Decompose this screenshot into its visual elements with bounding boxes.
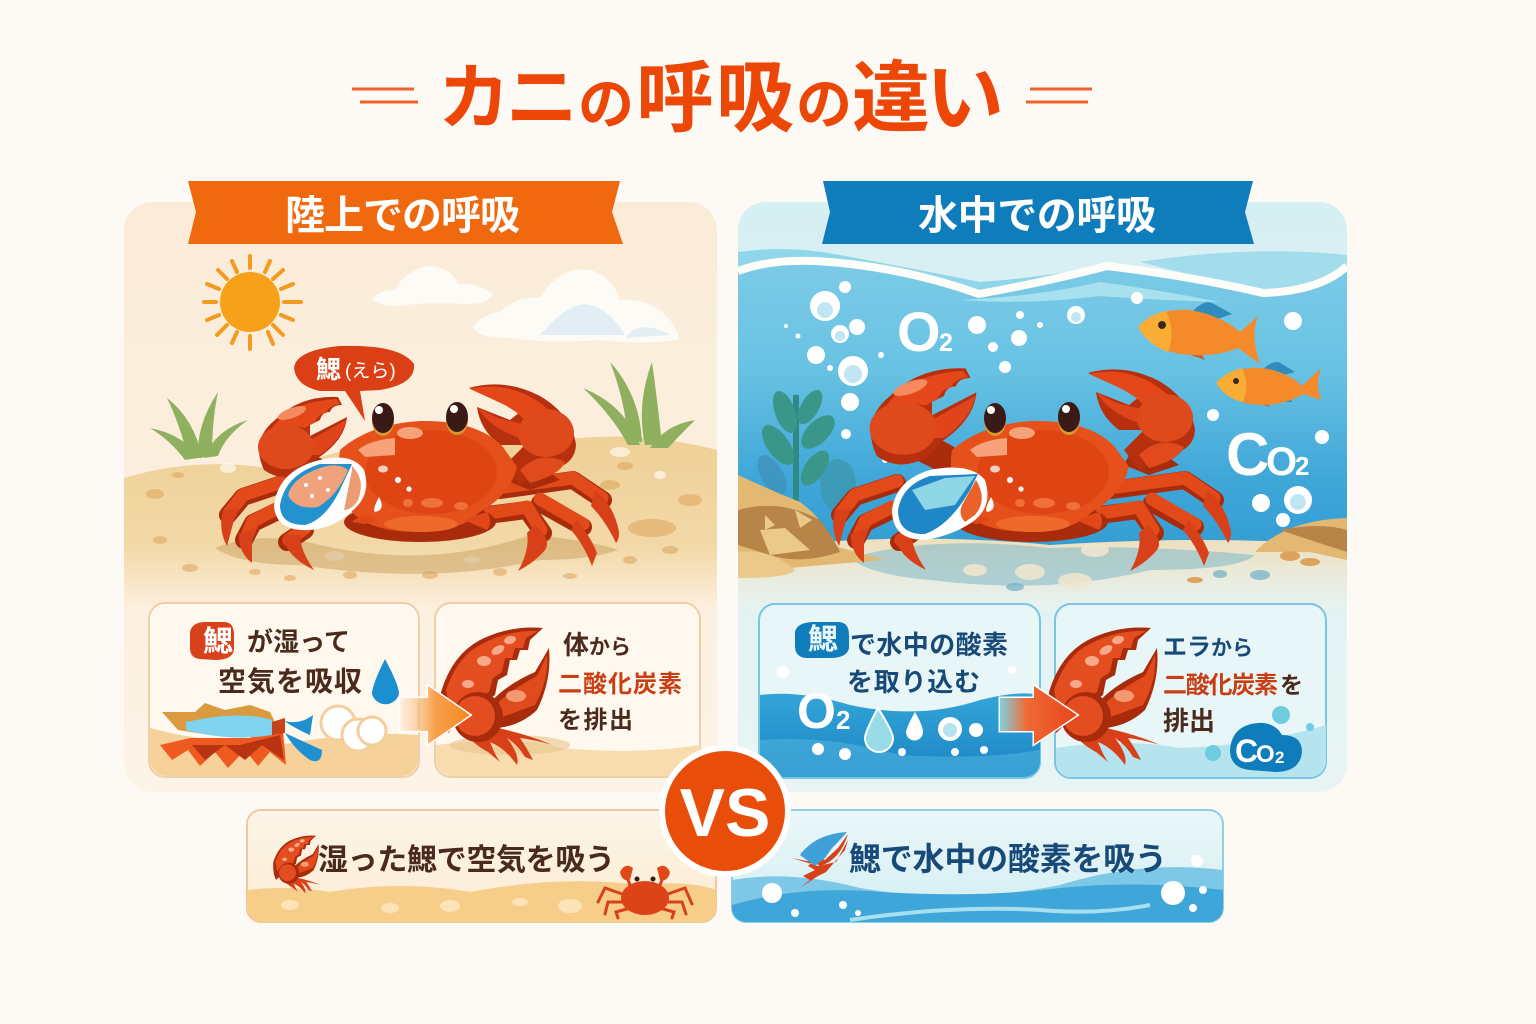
claw icon [273, 836, 320, 893]
CO2 cloud [1205, 706, 1314, 772]
text: を [1280, 672, 1303, 698]
gill badge [795, 622, 849, 658]
land ribbon heading: 陸上での呼吸 [285, 194, 520, 238]
crab [833, 368, 1231, 571]
claw icon [1049, 628, 1160, 765]
arrow: land [400, 686, 470, 744]
text: を排出 [558, 707, 633, 734]
fish 1 [1138, 302, 1260, 364]
gill badge [190, 622, 234, 660]
gill badge: 鰓 [808, 623, 838, 656]
speech bubble: gill label: (えら) [345, 361, 396, 382]
panel: land breathing [124, 181, 717, 792]
crab shadow [215, 535, 618, 574]
card: exhale CO2 on land [435, 603, 700, 777]
crab [221, 384, 619, 571]
arrow: water [1000, 686, 1077, 744]
gill closeup [274, 458, 366, 530]
title: 違い [852, 54, 1004, 142]
VS badge [659, 745, 791, 877]
clouds [372, 266, 678, 342]
wave crest [738, 261, 1347, 294]
text [1163, 634, 1303, 736]
text: が湿って [247, 627, 350, 657]
CO2 cloud: 2 [1275, 748, 1284, 767]
land ribbon heading [188, 181, 623, 244]
CO2 label: 2 [1295, 451, 1309, 481]
text: 二酸化炭素 [558, 671, 682, 698]
summary bar: water [732, 810, 1223, 922]
card: gills moist absorb air [149, 603, 419, 777]
grass right [583, 362, 695, 448]
text: 二酸化炭素 [1163, 672, 1278, 699]
fish 2 [1216, 362, 1321, 407]
text: で水中の酸素 [850, 630, 1008, 660]
gill badge: 鰓 [203, 625, 233, 658]
text: 体から [563, 630, 631, 660]
gill icon [160, 703, 322, 768]
text: 鰓で水中の酸素を吸う [849, 841, 1167, 877]
O2 label: O [897, 300, 941, 363]
water ribbon heading [822, 181, 1254, 244]
panel: water breathing [738, 181, 1347, 792]
title: の [796, 73, 852, 136]
card: gills take in oxygen [759, 604, 1040, 778]
drops and bubbles [777, 666, 1016, 760]
oxygen label: 2 [836, 705, 850, 735]
shadow under crab [850, 543, 1255, 586]
CO2 cloud: O [1256, 741, 1275, 768]
text: 排出 [1163, 706, 1215, 736]
CO2 label: C [1226, 421, 1269, 488]
CO2 label [1226, 421, 1309, 488]
title: 呼吸 [636, 54, 794, 142]
rocks right [1255, 518, 1347, 560]
small crab [598, 866, 692, 918]
speech bubble: gill label [294, 346, 414, 421]
water drop [372, 659, 399, 704]
text: 湿った鰓で空気を吸う [318, 844, 615, 877]
claw icon [792, 832, 848, 888]
puffs of air [321, 706, 386, 751]
sun [204, 256, 301, 349]
surface bands [738, 249, 1066, 290]
CO2 cloud: C [1235, 733, 1258, 769]
grass left [150, 392, 248, 460]
text [847, 630, 1008, 697]
seabed [738, 538, 1347, 598]
title: カニ [438, 59, 578, 139]
seaweed [758, 390, 856, 510]
rocks left [738, 475, 885, 572]
card: exhale CO2 in water [1049, 604, 1326, 778]
water body [738, 264, 1347, 545]
summary bar: land [247, 810, 716, 922]
text [218, 627, 362, 697]
title: の [578, 73, 634, 136]
O2 label: 2 [939, 329, 953, 357]
water ribbon heading: 水中での呼吸 [918, 194, 1156, 238]
title [438, 54, 1004, 142]
gill closeup [892, 468, 987, 540]
text: エラから [1163, 634, 1253, 661]
sand ground [124, 434, 717, 610]
CO2 label: O [1266, 440, 1297, 484]
oxygen label: O [797, 683, 836, 739]
text [558, 630, 682, 734]
claw icon [441, 628, 552, 765]
text: 空気を吸収 [218, 666, 362, 697]
text: を取り込む [847, 667, 980, 697]
VS badge: VS [680, 775, 770, 851]
bubbles [784, 281, 1329, 527]
speech bubble: gill label: 鰓 [316, 356, 341, 384]
